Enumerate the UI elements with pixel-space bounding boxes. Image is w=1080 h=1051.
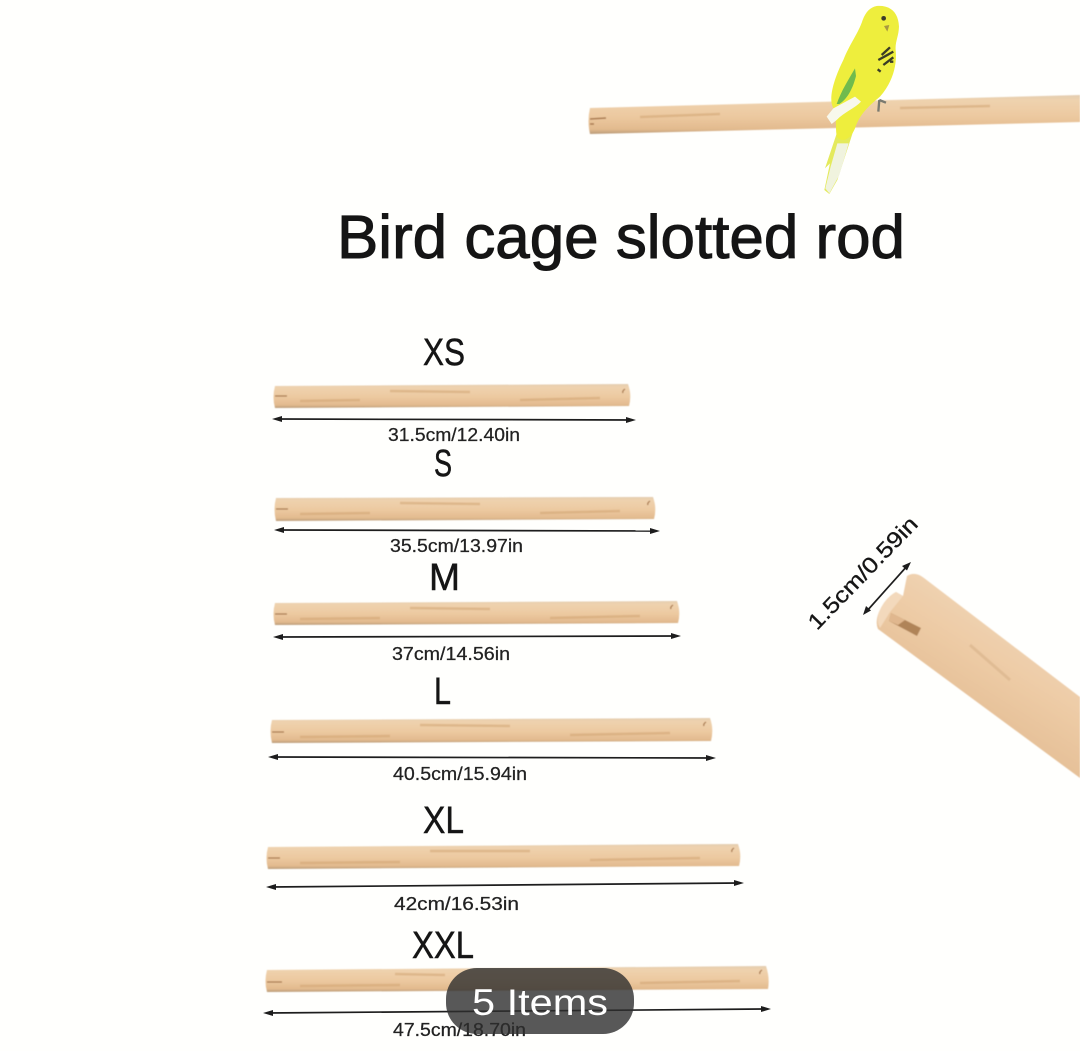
- badge: 5 items: 5 Items: [472, 982, 608, 1023]
- dimension arrow M: [273, 633, 681, 640]
- label XXL: XXL: [412, 925, 474, 967]
- label XL: XL: [423, 800, 464, 842]
- dimension arrow XXL: [263, 1006, 771, 1016]
- size XXL rod group: [263, 925, 771, 1040]
- rod M: [274, 601, 679, 625]
- rod XS: [274, 384, 630, 408]
- dimension arrow: rod diameter: [863, 562, 911, 615]
- size M rod group: [273, 557, 681, 664]
- top rod with slot: [588, 95, 1080, 134]
- label S: S: [434, 443, 452, 485]
- label M: M: [429, 557, 460, 599]
- badge: 5 items: [446, 968, 634, 1034]
- rod L: [270, 718, 712, 743]
- dimension arrow XS: [272, 416, 636, 423]
- bird tail: [824, 107, 860, 194]
- dimension L: 40.5cm/15.94in: [393, 763, 527, 784]
- rod XL: [266, 844, 740, 869]
- label L: L: [434, 671, 451, 713]
- dimension arrow S: [274, 527, 660, 534]
- rod S: [274, 497, 655, 521]
- bird body: [831, 6, 899, 140]
- dimension: rod diameter: 1.5cm/0.59in: [803, 511, 923, 634]
- dimension arrow XL: [266, 880, 744, 890]
- rod XXL: [266, 966, 769, 992]
- size L rod group: [268, 671, 716, 784]
- bird wing markings: [878, 47, 893, 72]
- label XS: XS: [423, 332, 465, 374]
- bird wing: [837, 68, 856, 104]
- icon: yellow budgerigar perched on rod: [824, 6, 899, 194]
- dimension XL: 42cm/16.53in: [394, 893, 519, 914]
- size XS rod group: [272, 332, 636, 445]
- bird eye and beak: [881, 16, 886, 21]
- size S rod group: [274, 443, 660, 556]
- size XL rod group: [266, 800, 744, 914]
- dimension arrow L: [268, 754, 716, 761]
- dimension M: 37cm/14.56in: [392, 643, 510, 664]
- title: Bird cage slotted rod: [337, 203, 905, 271]
- icon: angled rod end close-up with slot: [877, 574, 1080, 778]
- dimension S: 35.5cm/13.97in: [390, 535, 523, 556]
- dimension XS: 31.5cm/12.40in: [388, 424, 520, 445]
- bird white belly patch: [827, 97, 861, 124]
- bird foot: [878, 100, 886, 112]
- dimension XXL: 47.5cm/18.70in: [393, 1019, 526, 1040]
